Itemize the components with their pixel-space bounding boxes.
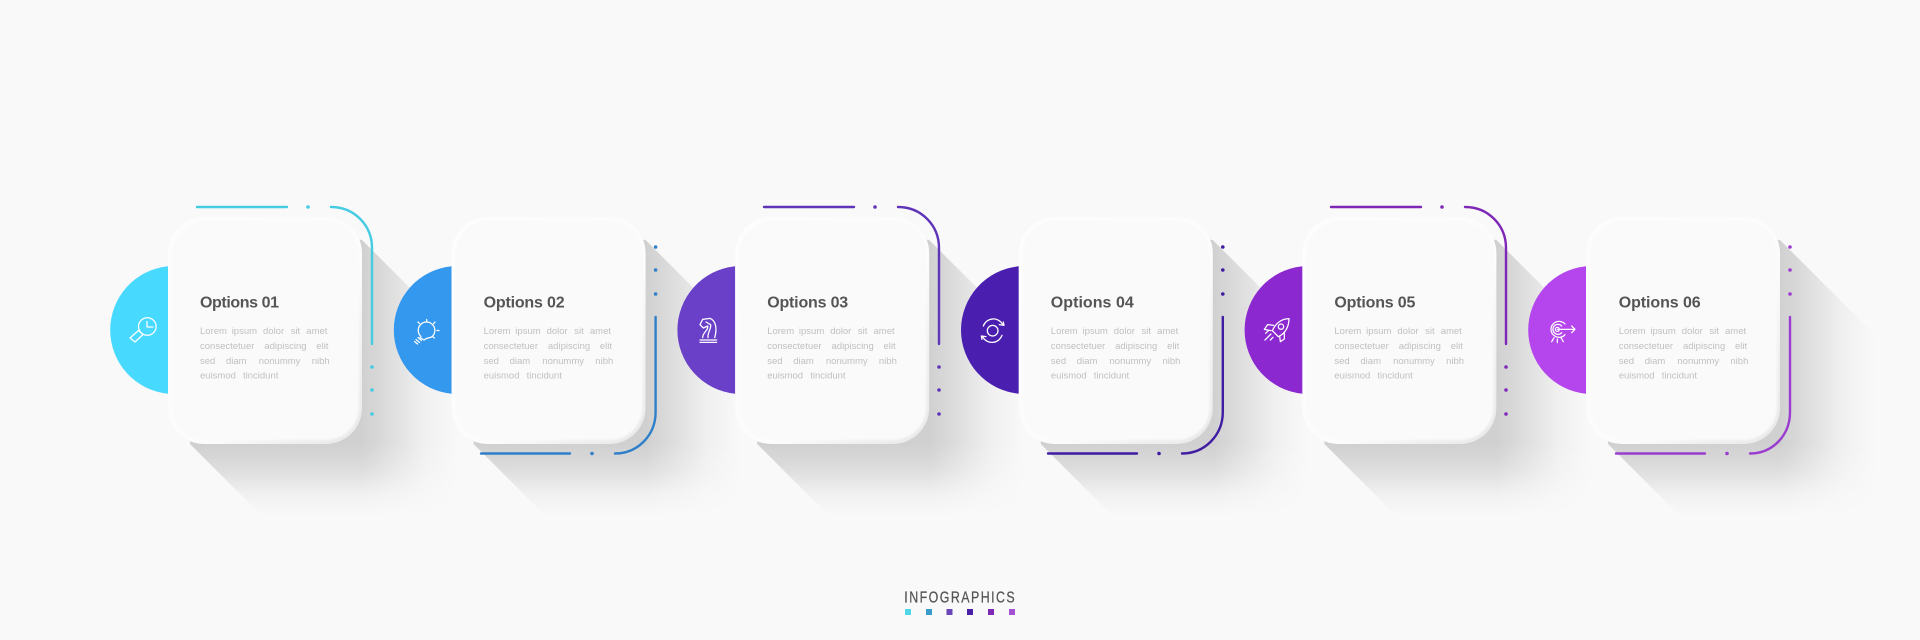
body text 01: consectetuer: [200, 341, 254, 352]
body text 02: dolor: [547, 326, 568, 337]
body text 04: amet: [1157, 326, 1179, 337]
heading 05: Options 05: [1334, 294, 1415, 312]
body text 01: tincidunt: [243, 370, 279, 382]
half circle 03: [677, 266, 735, 394]
body text 03: euismod: [767, 370, 803, 382]
body text 02: consectetuer: [484, 341, 538, 352]
body text 05: tincidunt: [1377, 370, 1413, 382]
body text 04: dolor: [1114, 326, 1135, 337]
body text 02: tincidunt: [527, 370, 562, 382]
accent line 05: [1331, 205, 1508, 416]
body text 01: Lorem: [200, 326, 227, 337]
body text 06: adipiscing: [1683, 341, 1725, 352]
body text 04: elit: [1167, 341, 1180, 352]
icon: chess knight: [700, 318, 717, 342]
body text 02: diam: [510, 356, 530, 367]
card 04: [1019, 217, 1213, 444]
body text 03: Lorem: [767, 326, 794, 337]
body text 05: Lorem: [1334, 326, 1361, 337]
body text 02: ipsum: [515, 326, 541, 337]
long shadows behind cards: [190, 240, 1844, 494]
body text 01: sit: [291, 326, 301, 337]
body text 06: ipsum: [1650, 326, 1676, 337]
body text 06: dolor: [1682, 326, 1703, 337]
half circle 01: [110, 266, 168, 394]
body text 03: sed: [767, 356, 783, 367]
accent line 06: [1616, 245, 1792, 455]
body text 01: ipsum: [232, 326, 257, 337]
panel: option 06: [1528, 217, 1792, 455]
half circle 02: [394, 266, 452, 394]
body text 03: ipsum: [799, 326, 824, 337]
card 05: [1302, 217, 1496, 444]
body text 05: ipsum: [1366, 326, 1392, 337]
panel: option 03: [677, 205, 941, 444]
half circle 06: [1528, 266, 1586, 394]
body text 02: nibh: [595, 356, 613, 367]
body text 05: dolor: [1397, 326, 1419, 337]
body text 04: nonummy: [1110, 356, 1151, 367]
body text 05: diam: [1360, 356, 1381, 367]
body text 01: diam: [226, 356, 247, 367]
body text 04: tincidunt: [1094, 370, 1130, 382]
body text 05: sit: [1425, 326, 1435, 337]
body text 03: amet: [874, 326, 895, 337]
body text 06: diam: [1645, 356, 1665, 367]
body text 01: euismod: [200, 370, 236, 382]
body text 03: elit: [884, 341, 896, 352]
accent line 01: [197, 205, 374, 416]
icon: sync cycle: [981, 319, 1004, 342]
card 01: [168, 217, 362, 444]
body text 04: Lorem: [1051, 326, 1078, 337]
body text 01: adipiscing: [264, 341, 307, 352]
body text 06: consectetuer: [1619, 341, 1673, 352]
body text 06: elit: [1735, 341, 1748, 352]
body text 06: nibh: [1730, 356, 1748, 367]
accent line 04: [1048, 245, 1225, 455]
body text 05: sed: [1334, 356, 1350, 367]
panel: option 05: [1245, 205, 1508, 444]
heading 03: Options 03: [767, 294, 848, 312]
body text 04: sit: [1142, 326, 1151, 337]
body text 02: elit: [600, 341, 612, 352]
heading 01: Options 01: [200, 294, 279, 312]
body text 01: nibh: [312, 356, 330, 367]
body text 04: nibh: [1162, 356, 1180, 367]
body text 04: diam: [1077, 356, 1097, 367]
body text 06: Lorem: [1619, 326, 1646, 337]
body text 03: sit: [858, 326, 868, 337]
body text 02: sed: [484, 356, 499, 367]
legend colour squares: [905, 609, 1015, 615]
body text 06: nonummy: [1677, 356, 1719, 367]
body text 02: euismod: [484, 370, 520, 382]
body text 01: nonummy: [259, 356, 301, 367]
body text 02: Lorem: [484, 326, 511, 337]
accent line 02: [481, 245, 657, 455]
half circle 05: [1245, 266, 1302, 394]
icon: rocket: [1264, 319, 1289, 342]
body text 05: nibh: [1446, 356, 1464, 367]
half circle 04: [961, 266, 1019, 394]
accent line 03: [764, 205, 941, 416]
heading 06: Options 06: [1619, 294, 1701, 312]
body text 02: nonummy: [542, 356, 584, 367]
body text 06: tincidunt: [1662, 370, 1697, 382]
body text 05: adipiscing: [1399, 341, 1441, 352]
body text 01: dolor: [263, 326, 284, 337]
body text 04: euismod: [1051, 370, 1087, 382]
heading 02: Options 02: [484, 294, 565, 312]
icon: light bulb: [414, 320, 439, 344]
heading 04: Options 04: [1051, 294, 1134, 312]
panel: option 02: [394, 217, 657, 455]
body text 04: consectetuer: [1051, 341, 1105, 352]
body text 06: sit: [1709, 326, 1719, 337]
body text 01: sed: [200, 356, 215, 367]
body text 04: sed: [1051, 356, 1066, 367]
body text 06: amet: [1725, 326, 1746, 337]
icon: magnifier with clock: [130, 318, 156, 342]
body text 03: tincidunt: [810, 370, 846, 382]
body text 03: diam: [793, 356, 814, 367]
body text 06: sed: [1619, 356, 1634, 367]
body text 02: amet: [590, 326, 611, 337]
body text 05: elit: [1451, 341, 1463, 352]
body text 01: elit: [316, 341, 329, 352]
body text 05: consectetuer: [1334, 341, 1389, 352]
panel: option 04: [961, 217, 1225, 455]
body text 03: nibh: [879, 356, 897, 367]
panel: option 01: [110, 205, 374, 444]
body text 03: adipiscing: [832, 341, 874, 352]
body text 05: nonummy: [1393, 356, 1435, 367]
icon: target with arrow: [1551, 321, 1575, 343]
body text 02: sit: [574, 326, 584, 337]
body text 03: dolor: [830, 326, 851, 337]
body text 05: euismod: [1334, 370, 1370, 382]
body text 06: euismod: [1619, 370, 1655, 382]
card 03: [735, 217, 929, 444]
body text 01: amet: [306, 326, 328, 337]
body text 03: consectetuer: [767, 341, 822, 352]
body text 02: adipiscing: [548, 341, 590, 352]
title: infographics: INFOGRAPHICS: [904, 588, 1015, 606]
card 06: [1586, 217, 1780, 444]
body text 04: ipsum: [1082, 326, 1108, 337]
body text 03: nonummy: [826, 356, 868, 367]
body text 04: adipiscing: [1115, 341, 1157, 352]
card 02: [452, 217, 646, 444]
body text 05: amet: [1441, 326, 1462, 337]
